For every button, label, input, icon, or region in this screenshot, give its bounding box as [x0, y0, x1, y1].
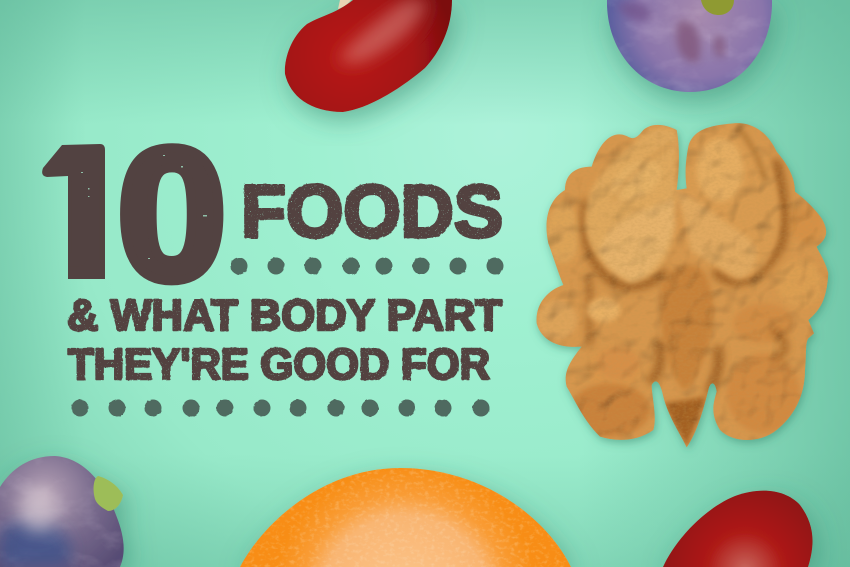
- kidney bean, top: [285, 0, 452, 112]
- fig, top right: [600, 0, 780, 95]
- kidney bean, bottom right: [663, 491, 813, 567]
- number 10: [42, 143, 224, 286]
- subheading line 1: & WHAT BODY PART: [67, 291, 502, 340]
- fig, bottom left: [0, 450, 130, 567]
- number 10: 0: [117, 109, 227, 319]
- dark crevices: [585, 163, 785, 390]
- carrot slice: [235, 465, 575, 567]
- walnut: [533, 122, 832, 452]
- upper lobes: [585, 125, 780, 390]
- number 10: 1: [31, 104, 145, 321]
- title: [42, 143, 504, 417]
- heading: foods: FOODS: [241, 170, 503, 253]
- dotted divider, lower: [72, 400, 490, 416]
- subheading line 2: THEY'RE GOOD FOR: [68, 340, 490, 389]
- dotted divider, upper: [230, 258, 504, 274]
